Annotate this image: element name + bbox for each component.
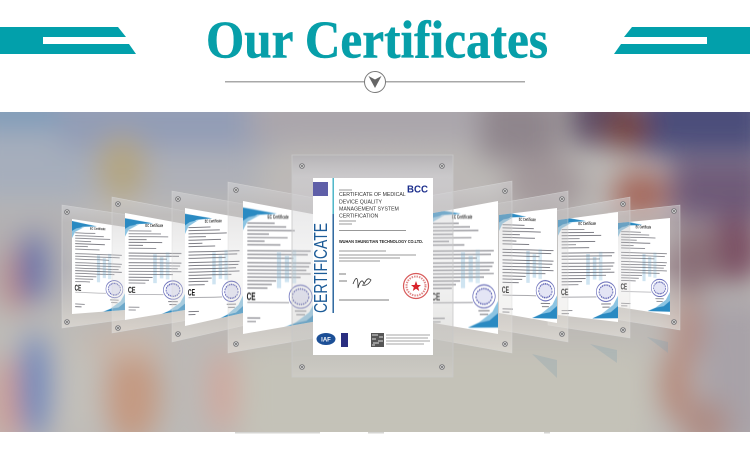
certificate panel: left 1: EC Certificate [90, 226, 106, 232]
certificate panel: left 2 [112, 196, 185, 334]
blurred photo background [0, 112, 750, 432]
certificate panel: right 1 [433, 180, 512, 354]
divider with chevron icon [225, 72, 525, 92]
bottom edge artefacts [235, 432, 550, 434]
certificate panel: right 1: CE [432, 291, 440, 303]
certificate panel: centre: CERTIFICATE [311, 223, 331, 313]
certificate panel: left 3: EC Certificate [205, 219, 222, 224]
certificate panel: centre: CERTIFICATE OF MEDICAL [339, 192, 406, 198]
certificate panel: right 2 [498, 190, 568, 342]
certificate panel: centre [292, 155, 453, 377]
certificate panel: right 3: EC Certificate [578, 221, 596, 227]
certificate panel: right 3 [548, 197, 630, 338]
reflections on the floor [532, 337, 668, 378]
certificate panel: left 3: CE [188, 287, 195, 298]
certificate panel: centre: CERTIFICATION [339, 214, 379, 220]
certificate panel: right 4: CE [621, 283, 627, 292]
certificate panel: left 3 [172, 190, 243, 342]
certificate panel: right 4: EC Certificate [636, 225, 651, 230]
title: Our Certificates [206, 12, 548, 70]
certificate panel: right 3: CE [561, 287, 568, 298]
certificate panel: centre: MANAGEMENT SYSTEM [339, 206, 399, 212]
certificate panel: left 4 [228, 182, 313, 354]
certificate panel: centre: DEVICE QUALITY [339, 200, 382, 206]
certificate panel: right 2: CE [502, 284, 509, 296]
certificate panel: left 4: EC Certificate [267, 214, 289, 220]
certificate panel: left 1 [62, 204, 125, 328]
certificate panel: left 2: EC Certificate [145, 224, 163, 228]
certificate panel: left 1: CE [75, 284, 82, 293]
certificate panel: centre: WUHAN SHUNGTIAN TECHNOLOGY CO.LTD. [339, 239, 423, 244]
certificate panel: right 2: EC Certificate [519, 217, 536, 223]
certificate panel: centre: IAF [321, 338, 331, 344]
certificate panel: right 1: EC Certificate [452, 214, 473, 220]
certificate panel: left 4: CE [247, 290, 256, 302]
header band right [614, 27, 750, 54]
certificate panel: centre: BCC [407, 184, 428, 196]
certificate panel: right 4 [608, 205, 680, 330]
certificate panel: left 2: CE [128, 284, 136, 295]
header band left [0, 27, 136, 54]
